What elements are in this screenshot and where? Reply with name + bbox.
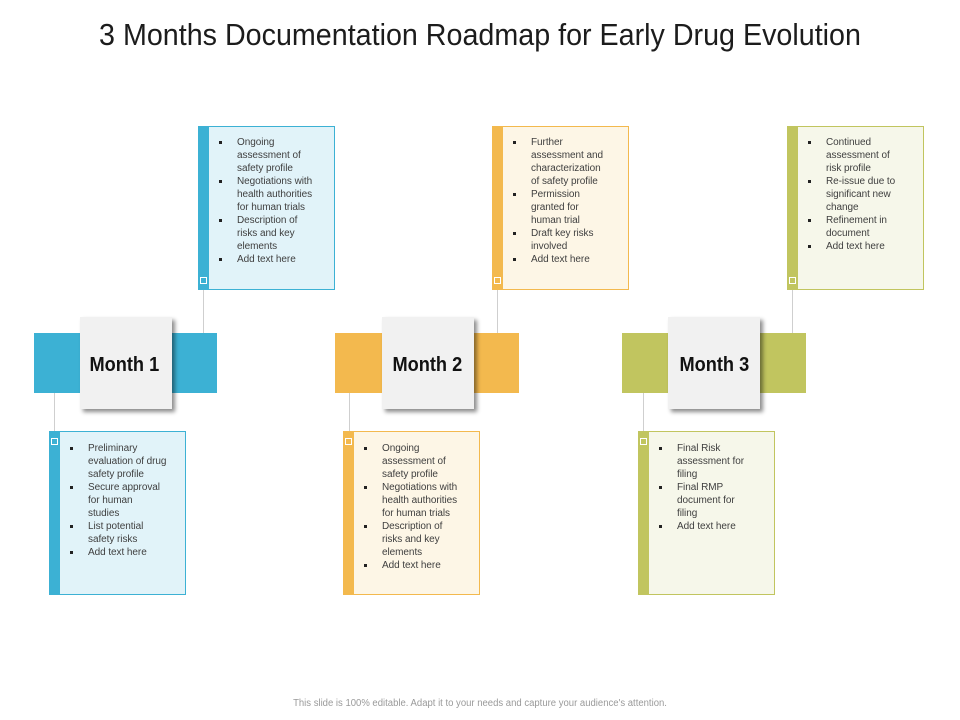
panel: month 1 lower notes <box>49 431 186 595</box>
panel: month 1 upper notes: Add text here <box>237 254 296 265</box>
panel: month 2 lower notes: health authorities <box>382 495 457 506</box>
panel: month 2 lower notes: for human trials <box>382 508 450 519</box>
panel: month 2 lower notes <box>343 431 480 595</box>
tile: month 2: Month 2 <box>393 354 462 376</box>
connector: month 3 top <box>792 285 793 333</box>
panel: month 3 lower notes: Add text here <box>677 521 736 532</box>
panel: month 3 lower notes: Final RMP <box>677 482 723 493</box>
panel: month 3 lower notes: assessment for <box>677 456 744 467</box>
band: month 2 <box>335 333 519 393</box>
panel: month 1 lower notes: safety risks <box>88 534 137 545</box>
panel: month 3 upper notes: risk profile <box>826 163 871 174</box>
panel: month 3 upper notes: Add text here <box>826 241 885 252</box>
panel: month 1 lower notes: Secure approval <box>88 482 160 493</box>
panel: month 1 lower notes: studies <box>88 508 119 519</box>
panel: month 3 upper notes: significant new <box>826 189 891 200</box>
panel: month 3 lower notes: Final Risk <box>677 443 720 454</box>
tile: month 3 <box>668 317 760 409</box>
panel: month 2 lower notes: Ongoing <box>382 443 419 454</box>
panel: month 2 lower notes: elements <box>382 547 422 558</box>
panel: month 1 upper notes: Ongoing <box>237 137 274 148</box>
panel: month 1 lower notes: for human <box>88 495 132 506</box>
panel: month 2 upper notes: Permission <box>531 189 580 200</box>
tile: month 1 <box>80 317 172 409</box>
footer note: This slide is 100% editable. Adapt it to your needs and capture your audience's attention. <box>293 698 667 709</box>
panel: month 3 upper notes: change <box>826 202 858 213</box>
panel: month 2 lower notes: assessment of <box>382 456 446 467</box>
panel: month 1 upper notes: Description of <box>237 215 297 226</box>
panel: month 3 lower notes: filing <box>677 508 697 519</box>
panel: month 1 upper notes <box>198 126 335 290</box>
connector: month 1 bottom <box>54 393 55 435</box>
band: month 3 <box>622 333 806 393</box>
panel: month 1 lower notes: Add text here <box>88 547 147 558</box>
tile: month 3: Month 3 <box>679 354 749 376</box>
panel: month 1 upper notes: Negotiations with <box>237 176 312 187</box>
panel: month 3 lower notes: filing <box>677 469 697 480</box>
panel: month 3 lower notes <box>638 431 775 595</box>
panel: month 2 upper notes: Add text here <box>531 254 590 265</box>
panel: month 3 upper notes <box>787 126 924 290</box>
connector: month 2 bottom <box>349 393 350 435</box>
panel: month 1 upper notes: assessment of <box>237 150 301 161</box>
panel: month 2 upper notes: assessment and <box>531 150 603 161</box>
connector: month 2 top <box>497 285 498 333</box>
tile: month 1: Month 1 <box>90 354 159 376</box>
panel: month 3 upper notes: Re-issue due to <box>826 176 895 187</box>
panel: month 3 upper notes: document <box>826 228 869 239</box>
panel: month 2 upper notes: granted for <box>531 202 579 213</box>
panel: month 3 lower notes: document for <box>677 495 735 506</box>
band: month 1 <box>34 333 217 393</box>
tile: month 2 <box>382 317 474 409</box>
panel: month 1 upper notes: risks and key <box>237 228 295 239</box>
connector: month 1 top <box>203 285 204 333</box>
panel: month 1 upper notes: for human trials <box>237 202 305 213</box>
panel: month 2 lower notes: risks and key <box>382 534 440 545</box>
panel: month 2 upper notes: characterization <box>531 163 601 174</box>
panel: month 1 upper notes: safety profile <box>237 163 293 174</box>
panel: month 2 lower notes: Add text here <box>382 560 441 571</box>
panel: month 2 upper notes <box>492 126 629 290</box>
panel: month 2 upper notes: involved <box>531 241 567 252</box>
connector: month 3 bottom <box>643 393 644 435</box>
panel: month 1 upper notes: elements <box>237 241 277 252</box>
panel: month 2 lower notes: Description of <box>382 521 442 532</box>
panel: month 2 upper notes: Further <box>531 137 563 148</box>
panel: month 1 lower notes: Preliminary <box>88 443 137 454</box>
panel: month 2 lower notes: safety profile <box>382 469 438 480</box>
panel: month 2 upper notes: Draft key risks <box>531 228 593 239</box>
panel: month 3 upper notes: Continued <box>826 137 871 148</box>
title: 3 Months Documentation Roadmap for Early Drug Evolution <box>99 17 861 52</box>
panel: month 3 upper notes: Refinement in <box>826 215 887 226</box>
panel: month 1 lower notes: safety profile <box>88 469 144 480</box>
panel: month 3 upper notes: assessment of <box>826 150 890 161</box>
panel: month 2 upper notes: of safety profile <box>531 176 598 187</box>
panel: month 2 upper notes: human trial <box>531 215 580 226</box>
panel: month 1 lower notes: List potential <box>88 521 143 532</box>
panel: month 1 upper notes: health authorities <box>237 189 312 200</box>
panel: month 2 lower notes: Negotiations with <box>382 482 457 493</box>
panel: month 1 lower notes: evaluation of drug <box>88 456 166 467</box>
